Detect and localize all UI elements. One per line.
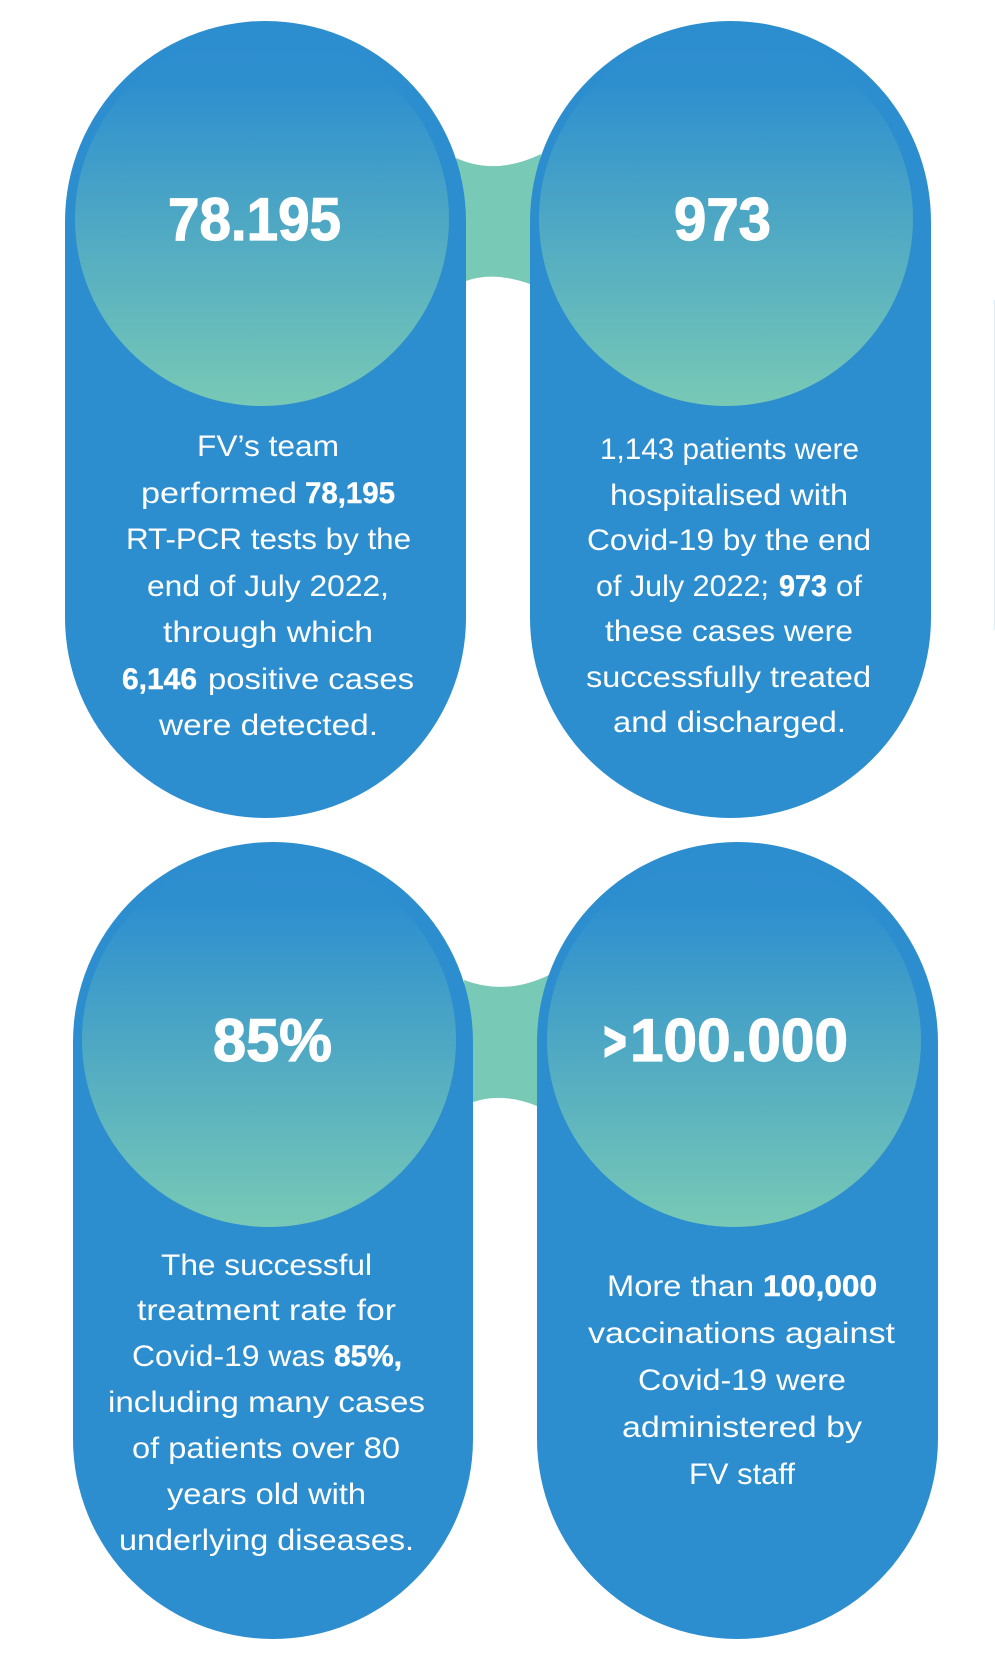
description: positive cases — [208, 663, 414, 696]
panel: vaccinations — [537, 842, 938, 1639]
description: Covid-19 was — [132, 1340, 325, 1373]
circle — [75, 32, 449, 406]
circle — [539, 32, 913, 406]
number: 973 — [674, 186, 771, 253]
description: 1,143 patients were — [600, 433, 859, 466]
connector: top row — [456, 154, 541, 284]
description: More than — [607, 1270, 754, 1303]
pill — [65, 21, 466, 818]
connector: bottom row — [464, 975, 549, 1106]
description: The successful — [161, 1249, 372, 1282]
description: underlying diseases. — [119, 1524, 414, 1557]
number: 78.195 — [168, 186, 341, 253]
description — [122, 430, 414, 742]
description: end of July 2022, — [147, 570, 389, 603]
description — [108, 1249, 425, 1557]
description: administered by — [622, 1411, 862, 1444]
description: FV staff — [689, 1458, 796, 1491]
description: vaccinations against — [588, 1317, 895, 1350]
description — [586, 433, 871, 739]
description: these cases were — [605, 615, 853, 648]
description: hospitalised with — [610, 479, 848, 512]
description: treatment rate for — [137, 1294, 396, 1327]
description: through which — [163, 616, 373, 649]
description: performed — [141, 477, 297, 510]
description: and discharged. — [613, 706, 846, 739]
pill — [73, 842, 473, 1639]
panel: tests — [65, 21, 466, 818]
description: 6,146 — [122, 663, 197, 696]
description: of July 2022; — [596, 570, 769, 603]
panel: hospitalised — [530, 21, 931, 818]
number: > — [604, 1013, 626, 1071]
description: FV’s team — [197, 430, 339, 463]
description: including many cases — [108, 1386, 425, 1419]
description: were detected. — [158, 709, 378, 742]
description: 973 — [779, 570, 827, 603]
description: of patients over 80 — [132, 1432, 400, 1465]
description: of — [836, 570, 863, 603]
description: 78,195 — [305, 477, 395, 510]
description — [588, 1270, 895, 1491]
edge sliver at right — [994, 300, 995, 630]
description: 85%, — [334, 1340, 402, 1373]
description: Covid-19 by the end — [587, 524, 871, 557]
circle — [82, 853, 456, 1227]
number: 85% — [213, 1007, 332, 1074]
description: 100,000 — [763, 1270, 877, 1303]
description: successfully treated — [586, 661, 871, 694]
description: RT-PCR tests by the — [126, 523, 411, 556]
circle — [547, 853, 921, 1227]
number: 100.000 — [630, 1007, 848, 1074]
panel: treatment rate — [73, 842, 473, 1639]
pill — [537, 842, 938, 1639]
pill — [530, 21, 931, 818]
description: years old with — [167, 1478, 366, 1511]
description: Covid-19 were — [638, 1364, 846, 1397]
